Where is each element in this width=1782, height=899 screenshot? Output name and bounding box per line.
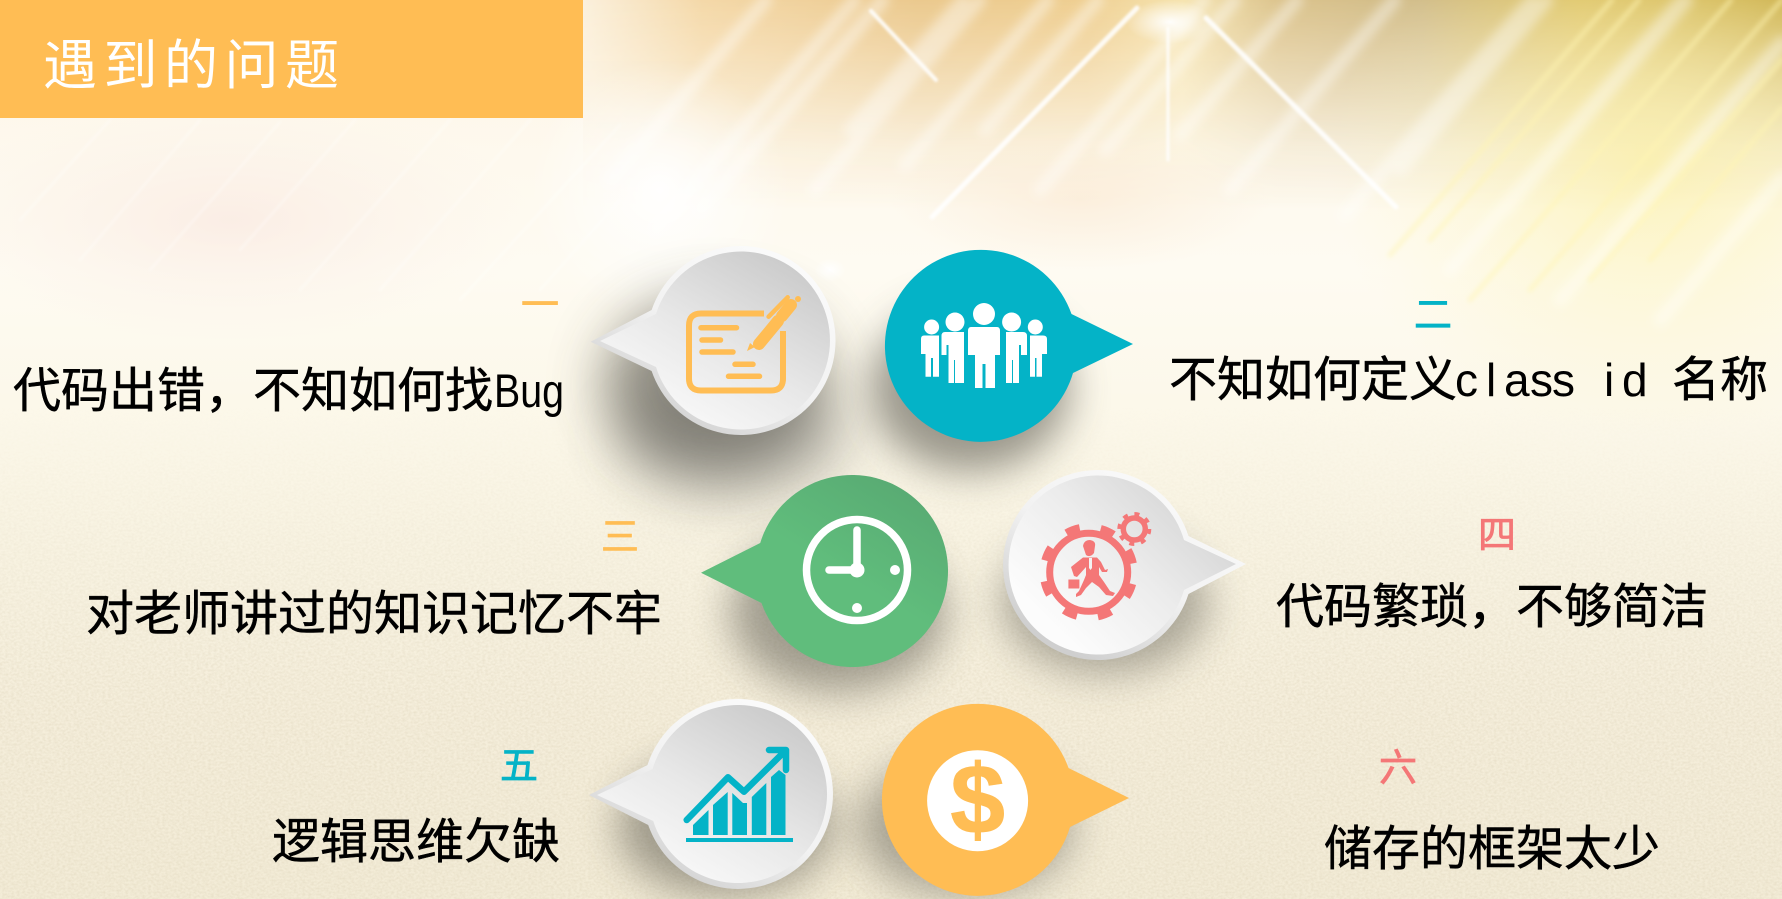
item 2 text: 二	[1414, 284, 1452, 339]
bubble 4: gear icon	[1001, 470, 1246, 674]
item 2 label: classid	[1455, 354, 1648, 406]
title: 遇到的问题	[43, 21, 346, 100]
icon: dollar coin: $	[950, 744, 1005, 854]
item 5 text	[272, 735, 560, 872]
item 4 text	[1276, 504, 1708, 637]
item 4 label: 代码繁琐，不够简洁	[1276, 567, 1708, 637]
bubble 1: edit icon	[591, 246, 853, 500]
icon: growth chart	[686, 750, 793, 842]
item 1 label: 代码出错，不知如何找Bug	[13, 351, 564, 421]
item 1 text: 一	[521, 274, 559, 329]
bubble 6: dollar icon	[857, 704, 1129, 896]
bubble 2: team icon	[870, 250, 1133, 472]
item 3 text: 三	[601, 506, 639, 561]
item 5 label: 逻辑思维欠缺	[272, 802, 560, 872]
item 2 label: 名称	[1672, 340, 1768, 410]
icon: dollar coin	[927, 744, 1028, 854]
icon: team of people	[921, 303, 1047, 388]
item 6 label: 储存的框架太少	[1324, 809, 1660, 879]
item 2 label: 不知如何定义	[1169, 340, 1457, 410]
item 5 text: 五	[500, 735, 538, 790]
bubble 5: growth chart icon	[589, 699, 833, 896]
item 3 text	[86, 506, 662, 644]
icon: man in gear	[1034, 514, 1149, 627]
item 4 text: 四	[1478, 504, 1516, 559]
item 1 text	[13, 274, 564, 421]
icon: clock	[806, 520, 908, 620]
item 6 text	[1324, 737, 1660, 879]
title banner	[0, 0, 583, 118]
item 3 label: 对老师讲过的知识记忆不牢	[86, 574, 662, 644]
item 2 text	[1169, 284, 1768, 410]
bubble 3: clock icon	[701, 475, 948, 692]
item 6 text: 六	[1379, 737, 1417, 792]
icon: note and pen	[689, 296, 801, 390]
